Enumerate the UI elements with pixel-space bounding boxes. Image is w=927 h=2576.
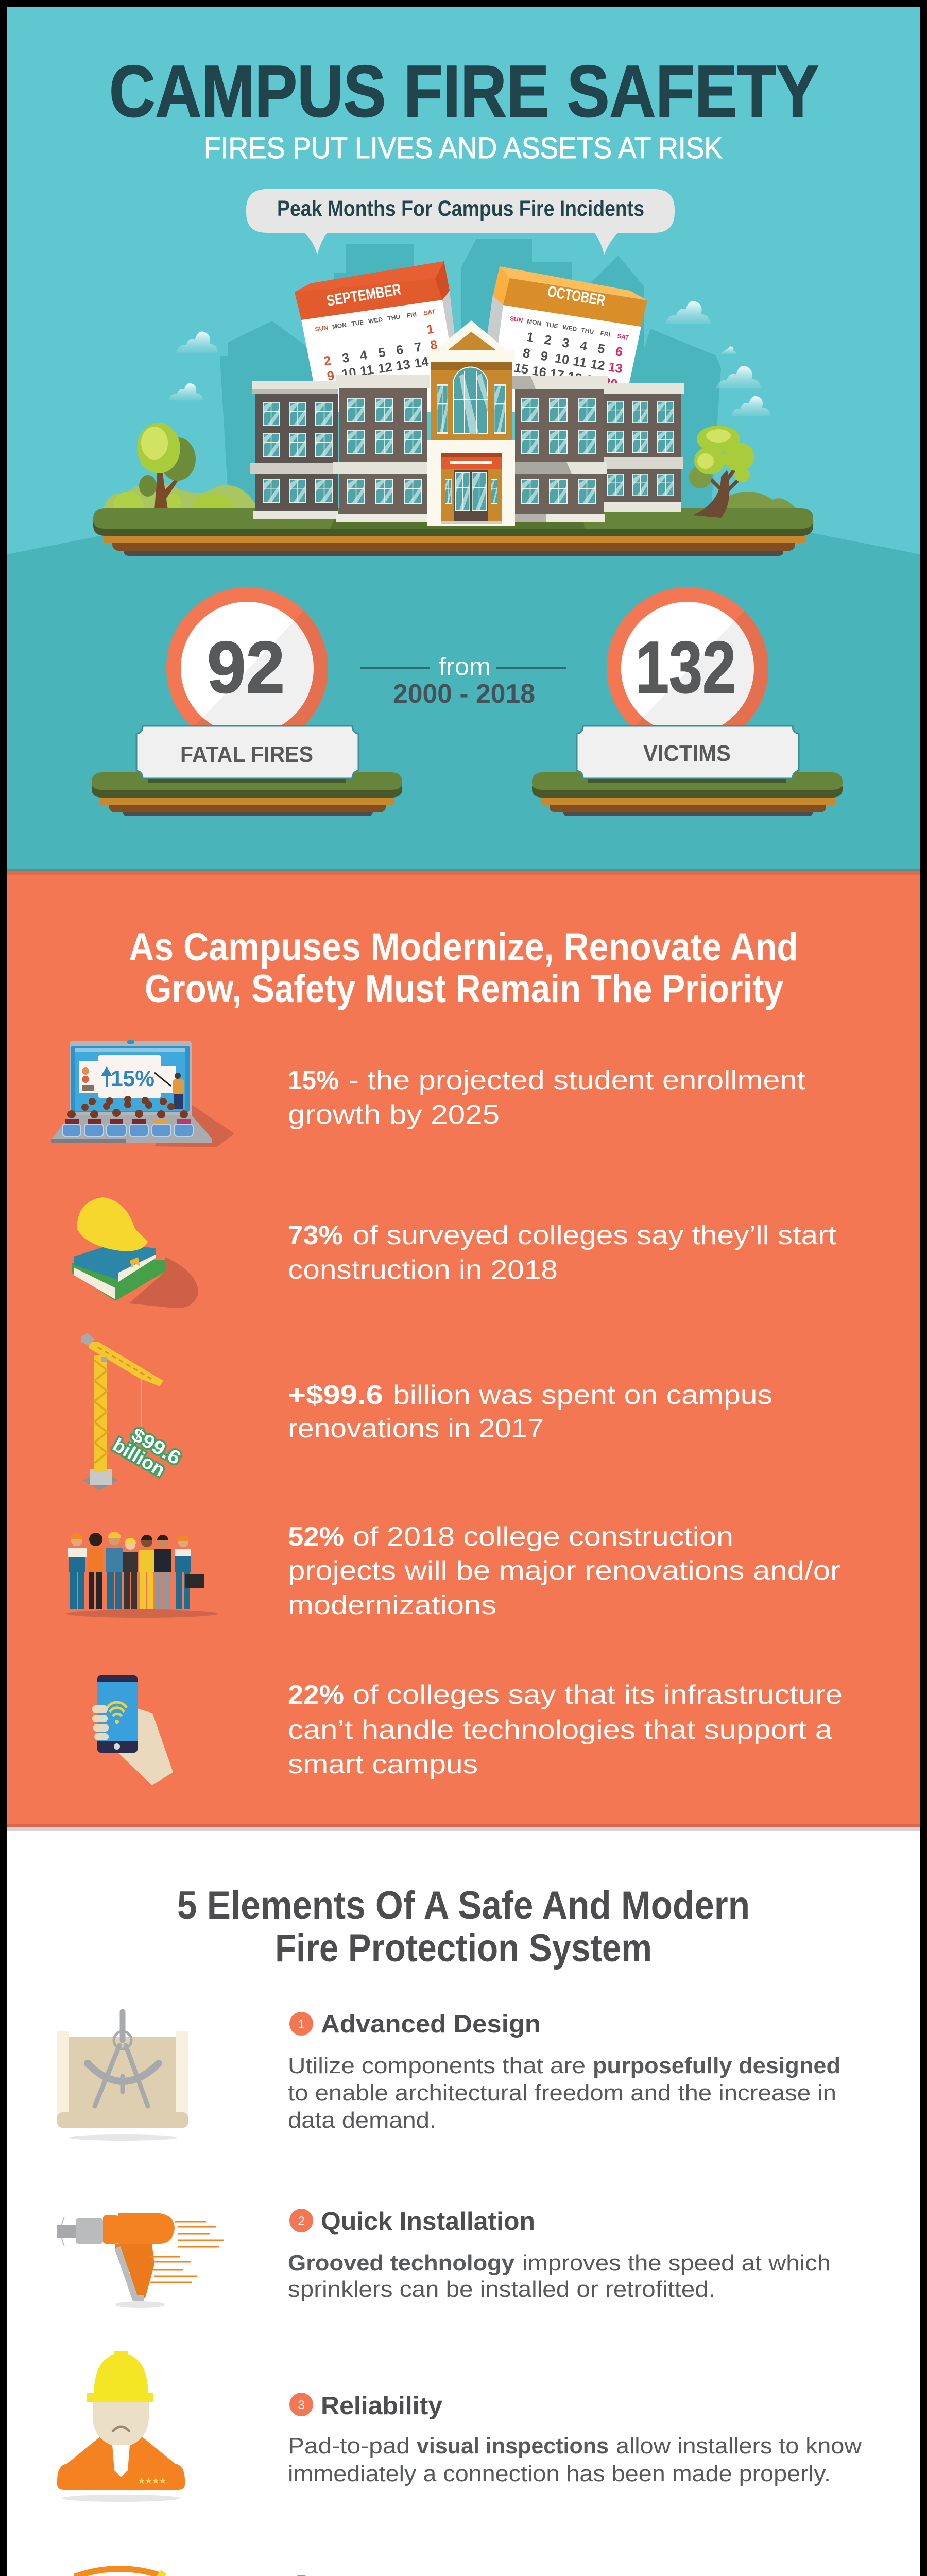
icon: october calendar: 13 <box>607 360 624 376</box>
text: smart campus <box>288 1680 843 1780</box>
icon: october calendar: TUE <box>545 320 559 330</box>
text: construction: of surveyed colleges say they’ll start <box>353 1221 837 1250</box>
icon: october calendar: 11 <box>572 354 588 370</box>
text: enrollment: 15% <box>288 1065 339 1095</box>
icon: october calendar: SAT <box>616 332 630 342</box>
icon: september calendar: 10 <box>341 365 357 381</box>
item 2: quick installation: Grooved technology <box>288 2250 515 2276</box>
icon: october calendar: 1 <box>525 330 535 345</box>
icon: october calendar: 4 <box>579 338 588 354</box>
right wing <box>604 383 684 512</box>
plaque: FATAL FIRES <box>180 742 313 767</box>
icon: crane lifting money <box>81 1333 185 1490</box>
callout: peak months: Peak Months For Campus Fire Incidents <box>277 196 644 221</box>
heading <box>177 1884 750 1970</box>
title: CAMPUS FIRE SAFETY <box>109 50 819 132</box>
date range: 2000 - 2018 <box>393 679 535 709</box>
icon: hills and left tree <box>103 423 796 522</box>
text: enrollment: growth by 2025 <box>288 1100 500 1130</box>
icon: september calendar: THU <box>387 313 401 322</box>
icon: october calendar: OCTOBER <box>546 283 607 310</box>
item 3: reliability: Pad-to-pad <box>288 2433 410 2459</box>
stat: fatal fires <box>92 582 402 816</box>
icon: laptop classroom: 15% <box>111 1066 154 1091</box>
item 1: advanced design: purposefully designed <box>593 2053 840 2078</box>
heading: 5 Elements Of A Safe And Modern <box>177 1884 750 1927</box>
item 3: reliability: visual inspections <box>417 2433 609 2459</box>
text: smart campus: 22% <box>288 1680 344 1710</box>
item 1: advanced design: to enable architectural freedom and the increase in <box>288 2080 836 2106</box>
item 3: reliability: 3 <box>298 2398 305 2412</box>
icon: crane lifting money: $99.6 <box>128 1423 185 1469</box>
icon: september calendar: FRI <box>406 311 417 319</box>
text: major renovations: of 2018 college construction <box>353 1522 733 1552</box>
icon: blueprint and compass <box>57 2012 188 2141</box>
plaque <box>577 726 799 778</box>
icon: hand holding smartphone <box>92 1675 173 1785</box>
item 3: reliability: Reliability <box>321 2392 442 2420</box>
text: smart campus: can’t handle technologies that support a <box>288 1715 832 1745</box>
icon: october calendar: 19 <box>584 372 600 388</box>
icon: island ground <box>93 508 813 556</box>
icon: september calendar: 13 <box>395 357 411 374</box>
text: major renovations: projects will be major renovations and/or <box>288 1556 840 1586</box>
plaque <box>136 726 358 778</box>
date range <box>360 653 566 709</box>
text: renovations spend <box>288 1380 772 1444</box>
item 1: advanced design: Utilize components that are <box>288 2053 586 2078</box>
text: enrollment: - the projected student enrollment <box>349 1065 806 1095</box>
item 2: quick installation <box>288 2208 831 2302</box>
icon: power drill <box>57 2213 224 2308</box>
text: renovations spend: renovations in 2017 <box>288 1414 544 1444</box>
icon: october calendar: 20 <box>602 375 619 392</box>
stat: victims <box>532 582 843 816</box>
icon: october calendar: 5 <box>596 341 606 357</box>
icon: september calendar: 1 <box>426 321 435 337</box>
left mid wing <box>333 375 430 522</box>
icon: october calendar: MON <box>526 317 542 327</box>
text: construction: 73% <box>288 1221 343 1250</box>
icon: engineer in hard hat: ★★★★ <box>138 2477 167 2485</box>
icon: october calendar: 2 <box>543 332 553 348</box>
icon: september calendar: SAT <box>423 308 436 317</box>
heading: As Campuses Modernize, Renovate And <box>129 925 798 969</box>
clouds <box>169 301 770 416</box>
icon: october calendar: SUN <box>509 315 523 324</box>
skyline <box>220 239 721 515</box>
item 4: hassle-free maintenance <box>288 2574 836 2576</box>
icon: october calendar: 12 <box>589 357 606 374</box>
icon: october calendar: 6 <box>614 344 624 360</box>
icon: october calendar: THU <box>581 327 594 335</box>
text: enrollment <box>288 1065 806 1130</box>
item 1: advanced design: 1 <box>298 2018 305 2031</box>
icon: september calendar: SEPTEMBER <box>325 281 403 310</box>
text: renovations spend: +$99.6 <box>288 1380 383 1410</box>
icon: september calendar: 14 <box>413 354 430 371</box>
ground base <box>532 772 843 816</box>
item 1: advanced design <box>288 2010 840 2133</box>
centre tower <box>427 320 515 526</box>
icon: september calendar: TUE <box>351 318 364 328</box>
left wing <box>250 381 338 519</box>
icon: hard hat on books <box>72 1197 198 1308</box>
icon: campus building <box>250 320 684 526</box>
icon: laptop classroom <box>52 1040 234 1147</box>
icon: october calendar: 10 <box>554 351 570 367</box>
medallion <box>607 587 768 725</box>
icon: september calendar: 11 <box>359 363 375 379</box>
date range: from <box>439 653 491 681</box>
icon: september calendar: 7 <box>414 340 423 355</box>
icon: right tree <box>689 426 754 518</box>
icon: september calendar <box>295 261 464 412</box>
text: smart campus: of colleges say that its infrastructure <box>353 1680 843 1710</box>
item 1: advanced design: Advanced Design <box>321 2010 541 2038</box>
icon: october calendar: WED <box>562 324 578 333</box>
text: major renovations <box>288 1522 840 1620</box>
icon: september calendar: 8 <box>429 337 438 353</box>
icon: september calendar: SUN <box>315 324 329 333</box>
icon: october calendar: 16 <box>531 363 547 380</box>
item 1: advanced design: data demand. <box>288 2108 436 2133</box>
icon: september calendar: 3 <box>341 350 350 366</box>
text: construction: construction in 2018 <box>288 1255 558 1285</box>
ground base <box>92 772 402 816</box>
icon: october calendar: 3 <box>561 335 571 351</box>
icon: shield with check <box>77 2569 164 2576</box>
icon: september calendar: 6 <box>395 343 404 358</box>
panel: campus growth statistics <box>7 871 920 1827</box>
medallion: 132 <box>636 626 736 708</box>
icon: october calendar: FRI <box>600 330 611 338</box>
icon: construction workers <box>66 1532 218 1618</box>
item 2: quick installation: improves the speed at which <box>522 2250 831 2276</box>
icon: october calendar: 15 <box>513 361 529 377</box>
icon: september calendar: 9 <box>326 368 335 384</box>
plaque: VICTIMS <box>643 741 731 766</box>
heading: Grow, Safety Must Remain The Priority <box>145 967 783 1011</box>
heading <box>129 925 798 1011</box>
item 3: reliability: allow installers to know <box>616 2433 862 2459</box>
item 3: reliability: immediately a connection has been made properly. <box>288 2461 831 2486</box>
item 2: quick installation: Quick Installation <box>321 2208 535 2235</box>
item 2: quick installation: sprinklers can be installed or retrofitted. <box>288 2277 715 2302</box>
icon: october calendar <box>476 266 647 412</box>
icon: crane lifting money: billion <box>109 1434 169 1481</box>
medallion <box>166 587 328 725</box>
text: major renovations: 52% <box>288 1522 344 1552</box>
icon: october calendar: 9 <box>540 349 549 364</box>
callout: peak months <box>246 189 675 255</box>
icon: september calendar: 5 <box>377 345 387 361</box>
icon: september calendar: WED <box>368 316 383 325</box>
text: renovations spend: billion was spent on campus <box>393 1380 772 1410</box>
icon: october calendar: 17 <box>548 366 565 383</box>
panel: five elements <box>7 1827 920 2576</box>
right mid wing <box>512 376 608 522</box>
icon: engineer in hard hat <box>57 2351 185 2502</box>
item 3: reliability <box>288 2392 862 2486</box>
panel: hero <box>7 7 920 871</box>
text: construction <box>288 1221 837 1285</box>
text: smart campus: smart campus <box>288 1750 478 1780</box>
subtitle: FIRES PUT LIVES AND ASSETS AT RISK <box>204 131 723 165</box>
icon: september calendar: 12 <box>377 360 393 376</box>
text: major renovations: modernizations <box>288 1590 496 1620</box>
icon: september calendar: MON <box>332 321 347 330</box>
item 2: quick installation: 2 <box>298 2214 305 2228</box>
heading: Fire Protection System <box>275 1926 652 1970</box>
icon: october calendar: 8 <box>522 346 531 361</box>
medallion: 92 <box>207 626 285 708</box>
icon: september calendar: 4 <box>359 348 368 363</box>
icon: october calendar: 18 <box>566 369 583 386</box>
icon: september calendar: 2 <box>323 353 332 368</box>
